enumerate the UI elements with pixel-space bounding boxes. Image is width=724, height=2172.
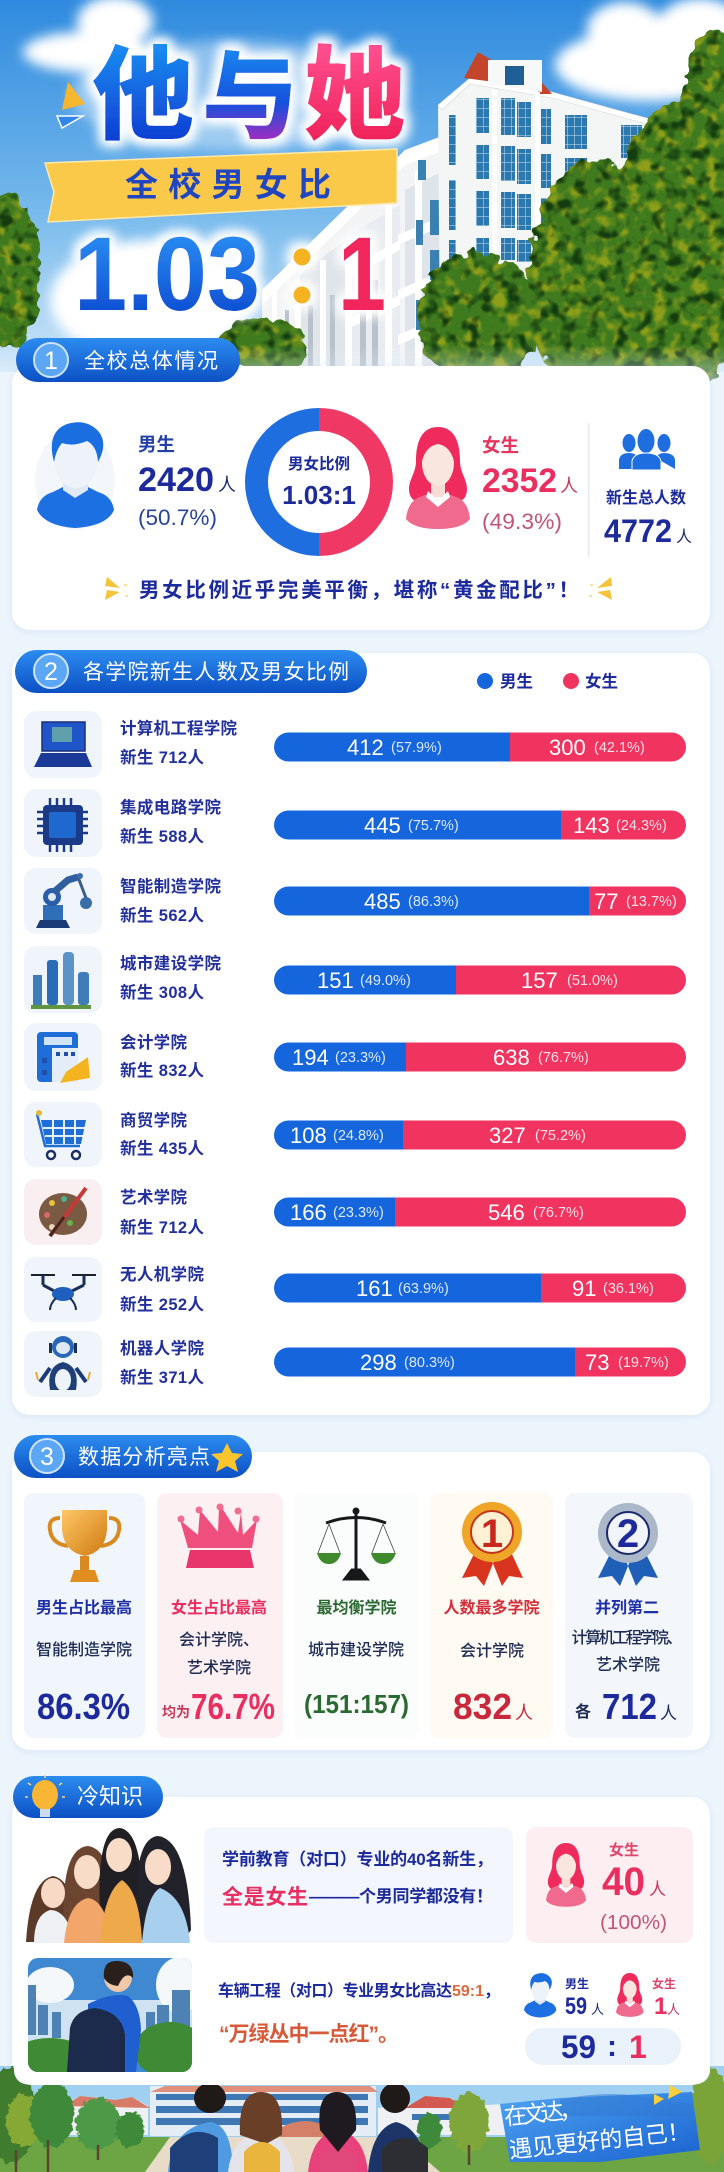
bar: 412 / 300: 412 <box>347 735 384 760</box>
card: 最均衡学院: (151:157) <box>304 1689 409 1719</box>
big ratio: 1 <box>338 216 386 333</box>
heading: section 3: 3 <box>40 1443 54 1471</box>
text: 车辆工程: 车辆工程（对口）专业男女比高达 <box>218 1981 452 2000</box>
row: 会计学院: 会计学院 <box>120 1032 188 1052</box>
girl stats: 女生 <box>482 435 519 456</box>
ratio pill: : <box>607 2030 617 2063</box>
title: 她 <box>304 39 406 153</box>
bar: 108 / 327: 108 <box>290 1123 327 1148</box>
boy stats: (50.7%) <box>138 505 217 530</box>
girl stats: (49.3%) <box>482 509 562 534</box>
bar: 485 / 77: (86.3%) <box>408 894 459 910</box>
bar: 412 / 300 <box>274 732 686 762</box>
bar: 194 / 638 <box>274 1042 686 1072</box>
card: 并列第二: 712 <box>602 1686 657 1727</box>
text card: 学前教育: 学前教育（对口）专业的40名新生， <box>222 1849 493 1869</box>
icon: cart <box>24 1102 102 1167</box>
row: 集成电路学院 <box>24 789 686 857</box>
text: 车辆工程: 59:1 <box>452 1983 484 2000</box>
row: 机器人学院: 机器人学院 <box>120 1338 204 1358</box>
icon: robot arm <box>24 868 102 934</box>
panel: highlights <box>12 1452 710 1750</box>
card: 并列第二: 各 <box>575 1702 591 1721</box>
bar: 161 / 91: 91 <box>572 1276 596 1301</box>
illustration: boy with backpack <box>28 1958 192 2072</box>
boy stats: 2420 <box>138 461 214 499</box>
illustration: four girls <box>26 1828 191 1943</box>
ratio pill: 59 <box>561 2029 596 2065</box>
bar: 194 / 638: 638 <box>493 1045 530 1070</box>
header: campus scene <box>0 0 724 420</box>
card: 人数最多学院: 人 <box>515 1703 533 1723</box>
row: 计算机工程学院: 计算机工程学院 <box>120 718 238 738</box>
bar: 412 / 300: (57.9%) <box>391 740 442 756</box>
big ratio <box>74 216 386 333</box>
stat: 59 boys 1 girl <box>524 1973 681 2065</box>
boy stats: 男生 <box>138 434 175 455</box>
bar: 485 / 77: 77 <box>594 889 618 914</box>
row: 集成电路学院: 新生 588人 <box>120 826 204 846</box>
bar: 298 / 73: (80.3%) <box>404 1355 455 1371</box>
heading: section 1 <box>16 338 240 382</box>
row: 商贸学院 <box>24 1102 686 1167</box>
icon: girl avatar <box>406 427 470 529</box>
row: 艺术学院: 新生 712人 <box>120 1217 204 1237</box>
heading: section 4 <box>13 1775 163 1818</box>
total students: 新生总人数 <box>606 488 686 507</box>
bar: 298 / 73 <box>274 1348 686 1376</box>
stat: 59 boys 1 girl: 人 <box>591 2002 604 2017</box>
legend: 男生 <box>500 672 533 691</box>
icon: title sparks <box>57 82 85 128</box>
icon: light bulb <box>25 1775 65 1817</box>
text card: 学前教育: ———个男同学都没有！ <box>309 1886 493 1906</box>
icon: robot <box>24 1331 102 1397</box>
row: 机器人学院: 新生 371人 <box>120 1367 204 1387</box>
row: 集成电路学院: 集成电路学院 <box>120 797 222 817</box>
bar: 161 / 91: (36.1%) <box>603 1281 654 1297</box>
trees <box>0 30 724 400</box>
bar: 166 / 546 <box>274 1198 686 1226</box>
card: 人数最多学院: 人数最多学院 <box>443 1598 540 1617</box>
callout: golden ratio: 男女比例近乎完美平衡，堪称“黄金配比”！ <box>139 578 579 602</box>
card: 人数最多学院: 会计学院 <box>460 1641 524 1660</box>
bar: 108 / 327: 327 <box>489 1123 526 1148</box>
row: 会计学院: 新生 832人 <box>120 1060 204 1080</box>
bar: 166 / 546: 166 <box>290 1200 327 1225</box>
bar: 151 / 157: (49.0%) <box>360 973 411 989</box>
icon: silver medal <box>598 1503 658 1586</box>
icon: drone <box>24 1257 102 1322</box>
legend <box>477 671 618 691</box>
icon: people group <box>619 429 675 470</box>
footer: campus scene <box>0 2066 724 2172</box>
bar: 485 / 77 <box>274 886 686 916</box>
row: 城市建设学院: 城市建设学院 <box>120 953 222 973</box>
bar: 151 / 157: 151 <box>317 968 354 993</box>
heading: section 3: 数据分析亮点 <box>78 1446 210 1469</box>
panel: trivia <box>10 1797 710 2085</box>
bar: 485 / 77: (13.7%) <box>626 894 677 910</box>
stat: 59 boys 1 girl: 人 <box>667 2002 680 2017</box>
card: 男生占比最高: 男生占比最高 <box>36 1598 132 1617</box>
bar: 166 / 546: (76.7%) <box>533 1205 584 1221</box>
stat card: 女生 40人: 女生 <box>609 1841 639 1859</box>
slogan banner <box>500 2085 700 2163</box>
card: 人数最多学院 <box>430 1493 553 1738</box>
row: 智能制造学院: 新生 562人 <box>120 905 204 925</box>
row: 智能制造学院 <box>24 868 686 934</box>
bar: 161 / 91 <box>274 1274 686 1302</box>
bar: 166 / 546: (23.3%) <box>333 1205 384 1221</box>
boy stats: 人 <box>218 475 236 495</box>
building wing <box>262 135 445 372</box>
row: 智能制造学院: 智能制造学院 <box>120 876 222 896</box>
donut chart <box>245 408 393 556</box>
row: 无人机学院: 无人机学院 <box>120 1264 204 1284</box>
row: 无人机学院: 新生 252人 <box>120 1294 204 1314</box>
text card: 学前教育 <box>204 1827 513 1943</box>
total students: 4772 <box>604 513 672 549</box>
bar: 108 / 327 <box>274 1120 686 1150</box>
bar: 412 / 300: (42.1%) <box>594 740 645 756</box>
card: 女生占比最高: 均为 <box>162 1704 190 1720</box>
row: 机器人学院 <box>24 1331 686 1397</box>
legend: 女生 <box>585 671 618 691</box>
girl stats: 2352 <box>482 462 557 500</box>
trees <box>0 2067 724 2163</box>
slogan banner: 遇见更好的自己！ <box>508 2118 692 2163</box>
row: 无人机学院 <box>24 1257 686 1322</box>
stat card: 女生 40人 <box>526 1827 693 1943</box>
bar: 108 / 327: (75.2%) <box>535 1128 586 1144</box>
icon: laptop <box>24 711 102 778</box>
ribbon subtitle: 全校男女比 <box>125 166 331 203</box>
icon: gold medal: 1 <box>481 1512 503 1556</box>
panel: overall <box>12 366 710 630</box>
bar: 151 / 157 <box>274 965 686 994</box>
icon: calculator <box>24 1023 102 1091</box>
total students: 人 <box>676 528 692 546</box>
card: 最均衡学院 <box>294 1493 418 1738</box>
stat: 59 boys 1 girl: 女生 <box>652 1976 676 1991</box>
bar: 194 / 638: 194 <box>292 1045 329 1070</box>
card: 并列第二: 艺术学院 <box>596 1655 660 1674</box>
bar: 151 / 157: 157 <box>521 968 558 993</box>
row: 商贸学院: 商贸学院 <box>120 1110 188 1130</box>
row: 城市建设学院 <box>24 946 686 1013</box>
card: 男生占比最高 <box>24 1493 145 1738</box>
card: 最均衡学院: 最均衡学院 <box>316 1598 397 1617</box>
panel: colleges <box>12 653 710 1415</box>
card: 并列第二: 人 <box>660 1704 677 1723</box>
bar: 412 / 300: 300 <box>549 735 586 760</box>
icon: palette <box>24 1179 102 1245</box>
icon: trophy <box>50 1510 119 1582</box>
card: 最均衡学院: 城市建设学院 <box>308 1640 404 1659</box>
bar: 194 / 638: (23.3%) <box>335 1050 386 1066</box>
card: 男生占比最高: 86.3% <box>37 1686 130 1727</box>
stat: 59 boys 1 girl: 男生 <box>565 1976 589 1991</box>
bar: 298 / 73: 298 <box>360 1350 397 1375</box>
row: 计算机工程学院 <box>24 711 686 778</box>
card: 并列第二: 计算机工程学院、 <box>572 1628 682 1647</box>
bar: 194 / 638: (76.7%) <box>538 1050 589 1066</box>
donut chart: 男女比例 <box>288 454 350 473</box>
row: 艺术学院: 艺术学院 <box>120 1187 188 1207</box>
heading: section 2 <box>15 650 367 693</box>
stat card: 女生 40人: (100%) <box>600 1912 667 1934</box>
card: 女生占比最高: 女生占比最高 <box>171 1598 267 1617</box>
text: 车辆工程 <box>218 1981 500 2046</box>
girl stats <box>482 435 578 534</box>
card: 人数最多学院: 832 <box>453 1686 512 1727</box>
stat card: 女生 40人: 人 <box>649 1880 666 1899</box>
heading: section 1: 1 <box>44 347 58 375</box>
total students <box>604 488 692 549</box>
title: 他 <box>92 39 194 153</box>
bar: 445 / 143: (24.3%) <box>616 818 667 834</box>
main tower <box>438 52 690 345</box>
bar: 151 / 157: (51.0%) <box>567 973 618 989</box>
boy stats <box>138 434 236 530</box>
bar: 445 / 143: 143 <box>573 813 610 838</box>
row: 会计学院 <box>24 1023 686 1091</box>
icon: buildings <box>24 946 102 1013</box>
stat: 59 boys 1 girl: 59 <box>565 1993 587 2020</box>
clouds <box>23 0 724 360</box>
text: 车辆工程: “万绿丛中一点红”。 <box>219 2023 399 2046</box>
card: 并列第二: 并列第二 <box>595 1598 659 1617</box>
title: 与 <box>202 45 298 152</box>
icon: boy avatar <box>35 422 115 530</box>
ribbon subtitle <box>45 149 397 222</box>
bar: 485 / 77: 485 <box>364 889 401 914</box>
icon: chip <box>24 789 102 857</box>
bar: 108 / 327: (24.8%) <box>333 1128 384 1144</box>
stat card: 女生 40人: 40 <box>602 1860 645 1904</box>
title <box>92 39 406 153</box>
heading: section 1: 全校总体情况 <box>84 350 218 373</box>
icon: gold medal <box>462 1502 523 1586</box>
big ratio: 1.03 <box>74 216 260 333</box>
ratio pill: 1 <box>629 2029 647 2065</box>
text card: 学前教育: 全是女生 <box>222 1885 308 1909</box>
ratio pill <box>525 2028 681 2065</box>
card: 女生占比最高 <box>157 1493 283 1738</box>
heading: section 3 <box>14 1435 252 1478</box>
icon: crown <box>178 1504 260 1568</box>
card: 并列第二 <box>565 1493 693 1738</box>
slogan banner: 在文达， <box>503 2096 583 2130</box>
icon: silver medal: 2 <box>617 1512 639 1556</box>
card: 男生占比最高: 智能制造学院 <box>36 1640 132 1659</box>
bar: 298 / 73: (19.7%) <box>618 1355 669 1371</box>
girl stats: 人 <box>560 476 578 496</box>
row: 艺术学院 <box>24 1179 686 1245</box>
icon: scales <box>317 1508 396 1579</box>
row: 计算机工程学院: 新生 712人 <box>120 747 204 767</box>
heading: section 2: 各学院新生人数及男女比例 <box>83 661 349 684</box>
card: 女生占比最高: 会计学院、 <box>179 1630 259 1649</box>
card: 女生占比最高: 艺术学院 <box>187 1658 251 1677</box>
bar: 445 / 143: 445 <box>364 813 401 838</box>
bar: 161 / 91: 161 <box>356 1276 393 1301</box>
bar: 161 / 91: (63.9%) <box>398 1281 449 1297</box>
heading: section 2: 2 <box>44 658 58 686</box>
bar: 298 / 73: 73 <box>585 1350 609 1375</box>
campus buildings <box>64 2086 505 2137</box>
donut chart: 1.03:1 <box>282 480 356 510</box>
card: 女生占比最高: 76.7% <box>191 1686 275 1727</box>
heading: section 4: 冷知识 <box>77 1784 143 1809</box>
bar: 445 / 143: (75.7%) <box>408 818 459 834</box>
row: 商贸学院: 新生 435人 <box>120 1138 204 1158</box>
bar: 445 / 143 <box>274 810 686 840</box>
students from behind <box>168 2083 428 2172</box>
bar: 166 / 546: 546 <box>488 1200 525 1225</box>
text: 车辆工程: ， <box>484 1983 500 2000</box>
stat: 59 boys 1 girl: 1 <box>654 1993 667 2020</box>
row: 城市建设学院: 新生 308人 <box>120 982 204 1002</box>
